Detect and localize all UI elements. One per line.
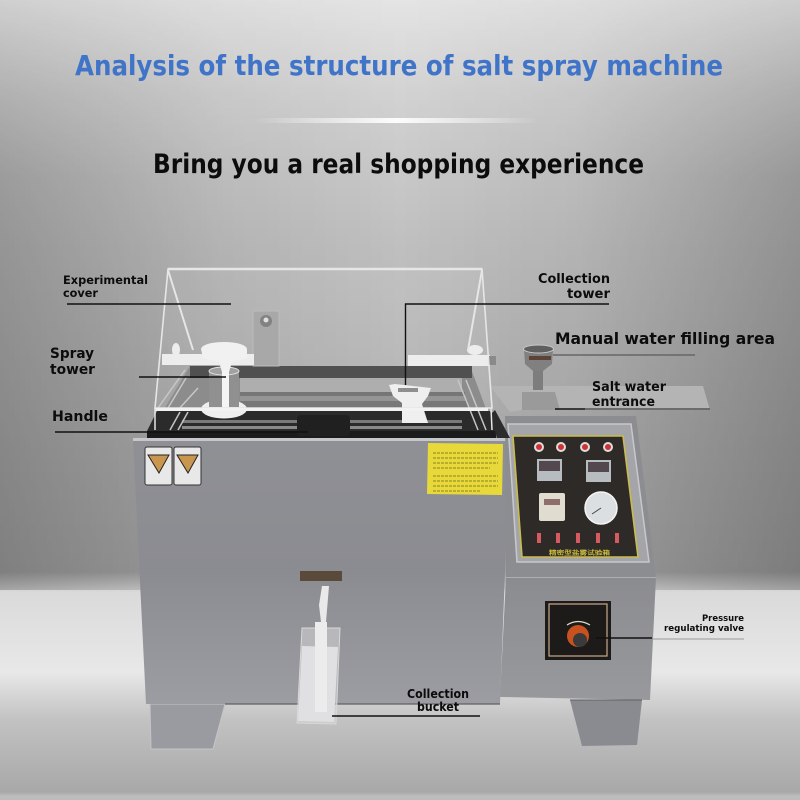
pressure gauge (585, 492, 617, 524)
label: Pressure regulating valve: Pressure (702, 614, 744, 624)
label: Experimental cover: cover (63, 286, 98, 300)
label: Experimental cover (63, 273, 231, 304)
title: Analysis of the structure of salt spray machine (75, 49, 723, 82)
salt water platform (490, 386, 710, 412)
label: Collection bucket: Collection (407, 687, 469, 701)
label: Pressure regulating valve (596, 614, 744, 639)
control console (505, 416, 656, 577)
label: Salt water entrance: Salt water (592, 380, 667, 395)
warning stickers (145, 447, 201, 485)
label: Spray tower: Spray (50, 346, 94, 362)
control panel (513, 436, 638, 557)
filling funnel (522, 345, 560, 410)
handle (297, 415, 350, 436)
collection bucket (297, 586, 340, 724)
subtitle: Bring you a real shopping experience (153, 149, 644, 180)
temperature displays (537, 459, 611, 482)
pipes (162, 343, 496, 366)
timer (539, 493, 565, 521)
label: Spray tower: tower (50, 362, 95, 378)
panel name: 精密型盐雾试验箱 (549, 549, 610, 557)
label: Salt water entrance: entrance (592, 395, 655, 410)
collection tower device (389, 384, 431, 423)
label: Collection tower: tower (567, 287, 611, 302)
console window (508, 424, 649, 562)
yellow notice label (427, 443, 503, 495)
transparent cover (155, 269, 492, 430)
left leg (150, 704, 225, 749)
salt tray interior (147, 366, 510, 438)
label: Handle: Handle (52, 409, 108, 425)
side cabinet (500, 577, 656, 700)
label: Spray tower (50, 346, 226, 378)
switches (537, 533, 619, 543)
pressure valve plate (545, 601, 611, 660)
decorative light flash (253, 118, 539, 123)
label: Collection bucket: bucket (417, 700, 459, 714)
label: Salt water entrance (555, 380, 710, 410)
main cabinet (133, 439, 510, 704)
label: Collection tower (406, 272, 611, 385)
indicator lights (535, 443, 612, 451)
label: Collection bucket (332, 687, 480, 716)
label: Pressure regulating valve: regulating valve (664, 624, 744, 634)
spray tower (201, 342, 247, 418)
salt spray machine (133, 269, 710, 749)
label: Manual water filling area: Manual water filling area (555, 329, 775, 348)
right leg (570, 700, 642, 746)
bracket plate (253, 311, 279, 366)
nameplate (300, 571, 342, 581)
label: Collection tower: Collection (538, 272, 610, 287)
label: Experimental cover: Experimental (63, 273, 148, 287)
